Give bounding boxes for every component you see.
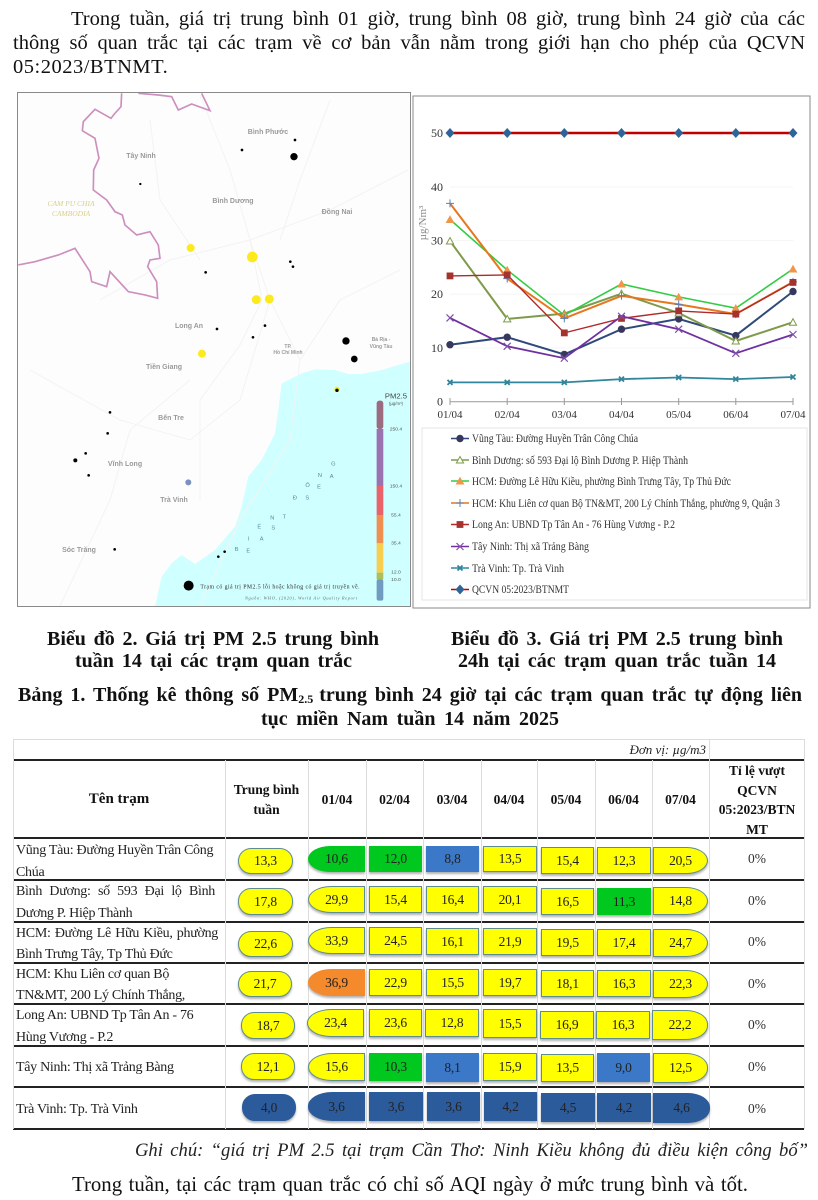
row: Long An: 23,4 bbox=[324, 1015, 347, 1030]
sea label: S bbox=[305, 496, 309, 502]
series: Bình Dương bbox=[450, 241, 793, 341]
x axis: 03/04 bbox=[552, 409, 577, 421]
sea area bbox=[155, 362, 410, 607]
map panel: PM2.5 weekly average bbox=[17, 92, 411, 607]
row: Tây Ninh bbox=[16, 1053, 766, 1086]
table header: Trung bình bbox=[234, 782, 299, 797]
row: Trà Vinh: 4,6 bbox=[673, 1100, 690, 1115]
row: Tây Ninh: 10,3 bbox=[384, 1059, 407, 1074]
map note: Nguồn: WHO, (2020), World Air Quality Report bbox=[244, 595, 358, 601]
row: HCM Lê Hữu Kiều: Bình Trưng Tây, Tp Thủ Đức bbox=[16, 947, 173, 962]
row: HCM Lê Hữu Kiều: 17,4 bbox=[613, 934, 635, 950]
row: HCM Lê Hữu Kiều: 19,5 bbox=[556, 934, 579, 950]
table header: QCVN bbox=[737, 783, 777, 798]
row: HCM Lê Hữu Kiều: 24,5 bbox=[384, 933, 407, 948]
row: Bình Dương: Bình Dương: số 593 Đại lộ Bình bbox=[16, 884, 215, 899]
row: HCM Khu Liên: TN&MT, 200 Lý Chính Thắng, bbox=[16, 988, 185, 1003]
legend: Tây Ninh: Thị xã Trảng Bàng bbox=[472, 539, 589, 553]
legend: HCM: Đường Lê Hữu Kiều, phường Bình Trưng Tây, Tp Thủ Đức bbox=[472, 474, 731, 488]
legend: Vũng Tàu: Đường Huyền Trân Công Chúa bbox=[472, 431, 639, 445]
table header: 02/04 bbox=[379, 792, 410, 807]
PM2.5 colour scale: 55.4 bbox=[391, 513, 401, 519]
row: HCM Khu Liên: 19,7 bbox=[499, 974, 521, 990]
data table bbox=[13, 739, 805, 1130]
sea label: E bbox=[246, 549, 250, 555]
caption: Biểu đồ 2 bbox=[47, 628, 379, 672]
footnote: Ghi chú: “giá trị PM 2.5 tại trạm Cần Thơ: Ninh Kiều không đủ điều kiện công bố” bbox=[135, 1140, 808, 1161]
row: Tây Ninh: 9,0 bbox=[615, 1060, 632, 1074]
legend: Trà Vinh: Tp. Trà Vinh bbox=[472, 561, 564, 575]
table header: 06/04 bbox=[608, 792, 639, 807]
row: Vũng Tàu: 0% bbox=[748, 851, 766, 866]
row: Vũng Tàu bbox=[16, 843, 766, 880]
y axis grid and labels: µg/Nm³ bbox=[417, 205, 429, 240]
Cambodia label bbox=[47, 199, 95, 218]
row: HCM Khu Liên: 36,9 bbox=[325, 974, 348, 990]
table header: Tỉ lệ vượt bbox=[729, 763, 785, 778]
province labels: Bến Tre bbox=[158, 414, 184, 422]
intro paragraph: Trong tuần, giá trị trung bình 01 giờ, trung bình 08 giờ, trung bình 24 giờ của các bbox=[71, 8, 805, 30]
row: Bình Dương: 20,1 bbox=[499, 892, 521, 906]
y axis grid and labels: 30 bbox=[431, 234, 443, 248]
series: HCM Khu Liên bbox=[450, 203, 793, 318]
row: Bình Dương: 11,3 bbox=[613, 894, 635, 908]
row: Long An: 12,8 bbox=[441, 1015, 463, 1030]
table header: MT bbox=[746, 822, 768, 837]
sea label bbox=[235, 461, 336, 555]
sea label: N bbox=[318, 473, 322, 479]
PM2.5 colour scale: (µg/m³) bbox=[389, 401, 404, 406]
sea label: I bbox=[248, 536, 250, 542]
row: HCM Khu Liên: 0% bbox=[748, 976, 766, 991]
PM2.5 colour scale: 250.4 bbox=[390, 427, 402, 433]
row: HCM Khu Liên: HCM: Khu Liên cơ quan Bộ bbox=[16, 967, 169, 982]
row: Vũng Tàu: 10,6 bbox=[325, 851, 348, 866]
legend: Long An: UBND Tp Tân An - 76 Hùng Vương - P.2 bbox=[472, 517, 675, 531]
row: Long An: 0% bbox=[748, 1017, 766, 1032]
row: Trà Vinh: Trà Vinh: Tp. Trà Vinh bbox=[16, 1102, 138, 1117]
province labels: Vũng Tàu bbox=[370, 344, 392, 350]
province labels: Tiền Giang bbox=[146, 362, 182, 371]
row: HCM Lê Hữu Kiều: 16,1 bbox=[441, 934, 464, 948]
row: Long An: 15,5 bbox=[499, 1016, 521, 1030]
series: QCVN limit bbox=[450, 132, 793, 134]
sea label: S bbox=[271, 526, 275, 532]
PM2.5 colour scale: 10.0 bbox=[391, 577, 401, 583]
unit note: Đơn vị: µg/m3 bbox=[629, 742, 706, 757]
row: Bình Dương: 0% bbox=[748, 893, 766, 908]
caption: Biểu đồ 3: Biểu đồ 3. Giá trị PM 2.5 trung bình bbox=[451, 628, 783, 650]
sea label: A bbox=[260, 536, 264, 542]
row: HCM Khu Liên bbox=[16, 967, 766, 1003]
row: Trà Vinh: 4,2 bbox=[502, 1098, 519, 1114]
row: Bình Dương: 16,5 bbox=[556, 894, 579, 908]
row: Vũng Tàu: 12,3 bbox=[613, 852, 635, 868]
province labels: Bình Phước bbox=[248, 129, 288, 136]
y axis grid and labels: 10 bbox=[431, 341, 443, 355]
x axis: 06/04 bbox=[723, 409, 749, 421]
row: Tây Ninh: 12,1 bbox=[257, 1058, 279, 1074]
row: Long An: 23,6 bbox=[384, 1015, 407, 1030]
row: Vũng Tàu: 13,3 bbox=[254, 853, 277, 868]
row: Long An: Long An: UBND Tp Tân An - 76 bbox=[16, 1008, 193, 1023]
row: Bình Dương: Dương P. Hiệp Thành bbox=[16, 906, 132, 921]
row: Trà Vinh: 3,6 bbox=[388, 1098, 404, 1114]
row: Tây Ninh: Tây Ninh: Thị xã Trảng Bàng bbox=[16, 1060, 174, 1075]
row: HCM Lê Hữu Kiều: 0% bbox=[748, 934, 766, 949]
row: Trà Vinh: 3,6 bbox=[445, 1098, 462, 1114]
row: Tây Ninh: 15,6 bbox=[325, 1059, 348, 1074]
row: Trà Vinh bbox=[16, 1092, 766, 1126]
sea label: E bbox=[317, 485, 321, 491]
table header: 05:2023/BTN bbox=[719, 802, 795, 817]
sea label: N bbox=[270, 515, 274, 521]
caption: Biểu đồ 2: tuần 14 tại các trạm quan trắc bbox=[75, 650, 352, 672]
legend bbox=[422, 428, 807, 600]
series: Long An bbox=[450, 275, 793, 333]
province labels: Tây Ninh bbox=[126, 153, 156, 160]
sea label: Ể bbox=[257, 524, 261, 531]
row: Vũng Tàu: 15,4 bbox=[556, 852, 579, 868]
row: Tây Ninh: 12,5 bbox=[669, 1060, 692, 1075]
sea label: Đ bbox=[293, 495, 297, 501]
row: HCM Lê Hữu Kiều bbox=[16, 926, 766, 962]
PM2.5 colour scale bbox=[377, 392, 407, 601]
sea label: A bbox=[330, 474, 334, 480]
row: Bình Dương: 16,4 bbox=[441, 892, 464, 906]
map note: Trạm có giá trị PM2.5 lỗi hoặc không có giá trị truyền về. bbox=[200, 584, 360, 591]
legend: QCVN 05:2023/BTNMT bbox=[472, 582, 570, 596]
PM2.5 colour scale: PM2.5 bbox=[385, 392, 407, 401]
table title bbox=[18, 684, 802, 730]
series: HCM Lê Hữu Kiều bbox=[450, 220, 793, 315]
row: HCM Lê Hữu Kiều: HCM: Đường Lê Hữu Kiều, phường bbox=[16, 926, 218, 941]
x axis: 05/04 bbox=[666, 409, 692, 421]
caption: Biểu đồ 3: 24h tại các trạm quan trắc tuần 14 bbox=[458, 650, 776, 672]
row: HCM Khu Liên: 15,5 bbox=[441, 974, 464, 990]
legend: Bình Dương: số 593 Đại lộ Bình Dương P. Hiệp Thành bbox=[472, 453, 688, 467]
province labels: Sóc Trăng bbox=[62, 547, 96, 554]
sea label: Ô bbox=[305, 482, 310, 489]
table header: tuần bbox=[253, 802, 280, 817]
map note bbox=[200, 584, 360, 601]
PM2.5 colour scale: 150.4 bbox=[390, 484, 402, 490]
table header: 07/04 bbox=[665, 792, 696, 807]
row: Long An bbox=[16, 1008, 766, 1045]
table header bbox=[89, 763, 796, 837]
y axis grid and labels: 50 bbox=[431, 126, 443, 140]
province labels: Trà Vinh bbox=[160, 497, 188, 504]
x axis bbox=[437, 398, 806, 421]
row: Long An: 18,7 bbox=[257, 1018, 279, 1032]
row: HCM Khu Liên: 18,1 bbox=[556, 976, 579, 990]
y axis grid and labels: 0 bbox=[437, 394, 443, 408]
Cambodia label: CAMBODIA bbox=[52, 209, 91, 218]
PM2.5 colour scale: 12.0 bbox=[391, 570, 401, 576]
row: Bình Dương: 15,4 bbox=[384, 892, 407, 906]
row: HCM Lê Hữu Kiều: 22,6 bbox=[254, 936, 277, 951]
province labels: Vĩnh Long bbox=[108, 461, 142, 468]
caption: Biểu đồ 2: Biểu đồ 2. Giá trị PM 2.5 trung bình bbox=[47, 628, 379, 650]
row: HCM Khu Liên: 16,3 bbox=[613, 976, 635, 990]
row: Vũng Tàu: 13,5 bbox=[499, 851, 521, 866]
series: Vũng Tàu bbox=[450, 292, 793, 354]
x axis: 01/04 bbox=[437, 409, 463, 421]
row: Long An: Hùng Vương - P.2 bbox=[16, 1030, 113, 1045]
closing sentence: Trong tuần, tại các trạm quan trắc có chỉ số AQI ngày ở mức trung bình và tốt. bbox=[72, 1173, 748, 1196]
row: Long An: 16,9 bbox=[556, 1017, 578, 1032]
row: Vũng Tàu: 8,8 bbox=[444, 851, 461, 866]
y axis grid and labels: 20 bbox=[431, 287, 443, 301]
road network bbox=[30, 95, 408, 606]
province labels bbox=[62, 129, 392, 554]
table title: Bảng 1. Thống kê thông số PM2.5 trung bình 24 giờ tại các trạm quan trắc tự động liên bbox=[18, 684, 802, 706]
intro paragraph: 05:2023/BTNMT. bbox=[13, 56, 168, 78]
national border bbox=[18, 93, 210, 298]
y axis grid and labels: 40 bbox=[431, 180, 443, 194]
table header: 01/04 bbox=[322, 792, 352, 807]
province labels: Hồ Chí Minh bbox=[273, 350, 303, 356]
row: Tây Ninh: 13,5 bbox=[556, 1060, 579, 1075]
PM2.5 colour scale: 35.4 bbox=[391, 540, 401, 546]
row: HCM Khu Liên: 22,9 bbox=[384, 974, 407, 990]
row: Trà Vinh: 4,2 bbox=[616, 1100, 632, 1114]
line chart panel: PM2.5 24h bbox=[412, 96, 810, 608]
row: HCM Khu Liên: 21,7 bbox=[254, 976, 276, 991]
row: Tây Ninh: 8,1 bbox=[444, 1060, 461, 1074]
row: HCM Lê Hữu Kiều: 33,9 bbox=[325, 932, 348, 948]
row: Long An: 16,3 bbox=[612, 1017, 634, 1032]
station dots, lower map bbox=[73, 350, 358, 591]
series: Trà Vinh bbox=[450, 377, 793, 382]
table header: 04/04 bbox=[494, 792, 524, 807]
sea label: T bbox=[283, 515, 287, 521]
row: Tây Ninh: 0% bbox=[748, 1059, 766, 1074]
province labels: TP. bbox=[284, 344, 292, 350]
station dots, upper map bbox=[139, 139, 350, 345]
row: Vũng Tàu: Vũng Tàu: Đường Huyền Trân Công bbox=[16, 843, 213, 858]
row: Bình Dương: 17,8 bbox=[254, 894, 277, 908]
sea label: G bbox=[331, 461, 336, 467]
x axis: 02/04 bbox=[495, 409, 520, 421]
province labels: Đồng Nai bbox=[322, 207, 352, 216]
row: Bình Dương: 29,9 bbox=[325, 892, 348, 906]
province labels: Bình Dương bbox=[212, 198, 254, 205]
table header: 05/04 bbox=[551, 792, 581, 807]
row: Trà Vinh: 0% bbox=[748, 1101, 766, 1116]
province labels: Long An bbox=[175, 323, 203, 330]
row: Trà Vinh: 3,6 bbox=[328, 1098, 345, 1114]
row: Tây Ninh: 15,9 bbox=[499, 1059, 521, 1074]
row: Trà Vinh: 4,5 bbox=[560, 1100, 576, 1114]
x axis: 04/04 bbox=[609, 409, 635, 421]
Cambodia label: CAM PU CHIA bbox=[47, 199, 95, 208]
row: HCM Lê Hữu Kiều: 24,7 bbox=[669, 935, 692, 950]
row: HCM Lê Hữu Kiều: 21,9 bbox=[499, 934, 521, 948]
y axis grid and labels bbox=[417, 126, 793, 408]
table header: 03/04 bbox=[437, 792, 467, 807]
row: Long An: 22,2 bbox=[669, 1017, 691, 1032]
row: Bình Dương bbox=[16, 884, 766, 921]
series: Tây Ninh bbox=[450, 316, 793, 358]
row: Trà Vinh: 4,0 bbox=[261, 1100, 277, 1114]
row: Vũng Tàu: 12,0 bbox=[384, 851, 407, 866]
sea label: B bbox=[235, 547, 239, 553]
row: Vũng Tàu: Chúa bbox=[16, 865, 44, 880]
intro paragraph: thông số quan trắc tại các trạm về cơ bản vẫn nằm trong giới hạn cho phép của QCVN bbox=[13, 32, 805, 54]
table header: Tên trạm bbox=[89, 791, 149, 807]
caption: Biểu đồ 3 bbox=[451, 628, 783, 672]
intro paragraph bbox=[13, 8, 805, 78]
row: Bình Dương: 14,8 bbox=[669, 893, 692, 908]
table title: tục miền Nam tuần 14 năm 2025 bbox=[261, 708, 559, 730]
row: Vũng Tàu: 20,5 bbox=[669, 852, 692, 868]
x axis: 07/04 bbox=[780, 409, 806, 421]
row: HCM Khu Liên: 22,3 bbox=[669, 976, 692, 991]
province labels: Bà Rịa - bbox=[372, 337, 391, 343]
